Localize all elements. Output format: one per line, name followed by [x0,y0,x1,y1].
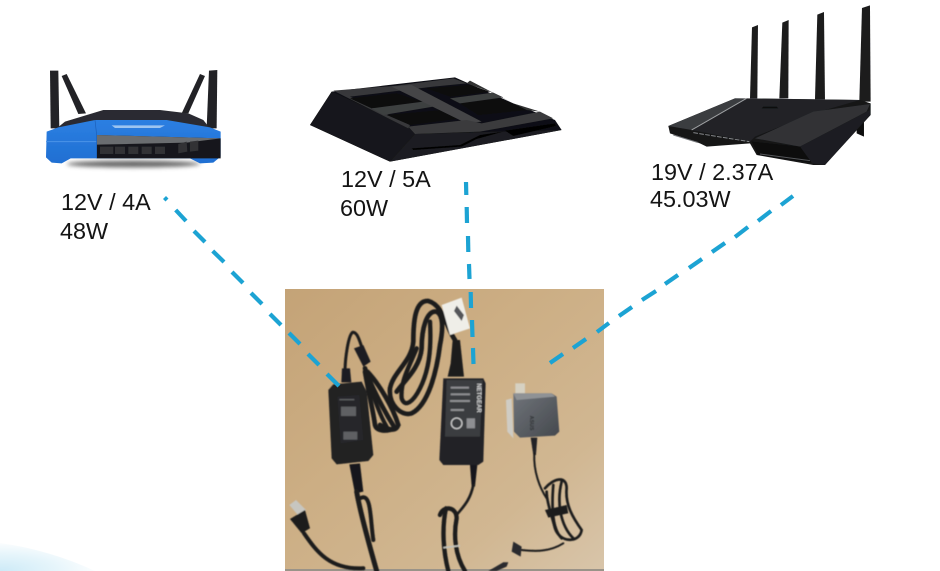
connector: second router to adapter [466,182,474,364]
connector: first router to adapter [164,198,339,386]
adapter: ASUS 19V 2.37A with cable: ASUS [528,416,534,431]
label: first router rating: 48W [60,218,108,244]
label: third router rating: 45.03W [650,186,731,212]
photo: three power adapters on wooden desk [285,289,604,571]
label: first router rating: 12V / 4A [61,189,151,215]
label: second router rating: 12V / 5A [341,166,431,192]
adapter: Linksys 12V 4A with cables [289,332,398,571]
router: blue four-antenna router [46,70,221,167]
connector: third router to adapter [550,196,793,363]
label: second router rating: 60W [340,195,388,221]
adapter: ASUS 19V 2.37A with cable [506,383,582,557]
router: black flat router [310,77,562,162]
adapter: Netgear 12V 5A with cables [390,298,508,571]
router: black four-antenna router [668,5,871,165]
background corner tint [0,543,95,571]
adapter: Netgear 12V 5A with cables: NETGEAR [475,383,481,413]
label: third router rating: 19V / 2.37A [651,159,774,185]
